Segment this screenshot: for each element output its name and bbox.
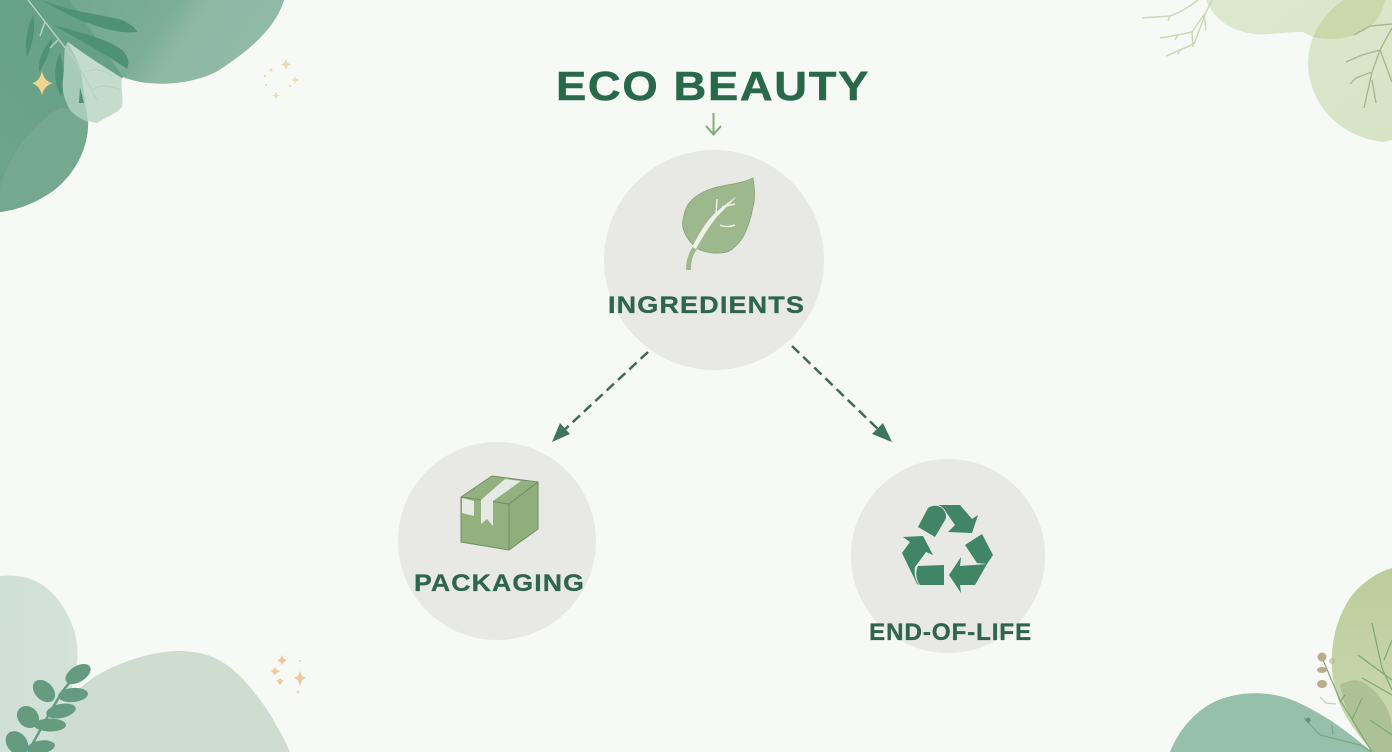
title: ECO BEAUTY — [556, 63, 870, 109]
label: end-of-life: END-OF-LIFE — [869, 619, 1032, 646]
decoration: bottom sparkles — [271, 655, 306, 693]
label: packaging: PACKAGING — [414, 570, 585, 597]
decoration: top-right blobs and twigs — [1142, 0, 1392, 142]
panel: ingredients — [604, 150, 824, 370]
panel: end-of-life — [851, 459, 1045, 653]
arrow: ingredients to packaging — [552, 352, 648, 442]
icon: box — [461, 476, 538, 550]
arrow: ingredients to end-of-life — [792, 346, 892, 442]
icon: gold sparkle — [32, 71, 53, 95]
icon: recycle symbol — [902, 505, 993, 593]
panel: packaging — [398, 442, 596, 640]
icon: leafy sprig — [1, 660, 94, 752]
arrow: title to ingredients — [706, 113, 721, 134]
decoration: bottom-left blobs and sprig — [0, 576, 290, 752]
decoration: top-left blobs and foliage — [0, 0, 284, 212]
decoration: bottom-right blobs and twigs — [1170, 568, 1392, 752]
label: ingredients: INGREDIENTS — [608, 292, 805, 319]
icon: leaf — [683, 178, 754, 270]
decoration: top sparkles — [264, 59, 299, 99]
